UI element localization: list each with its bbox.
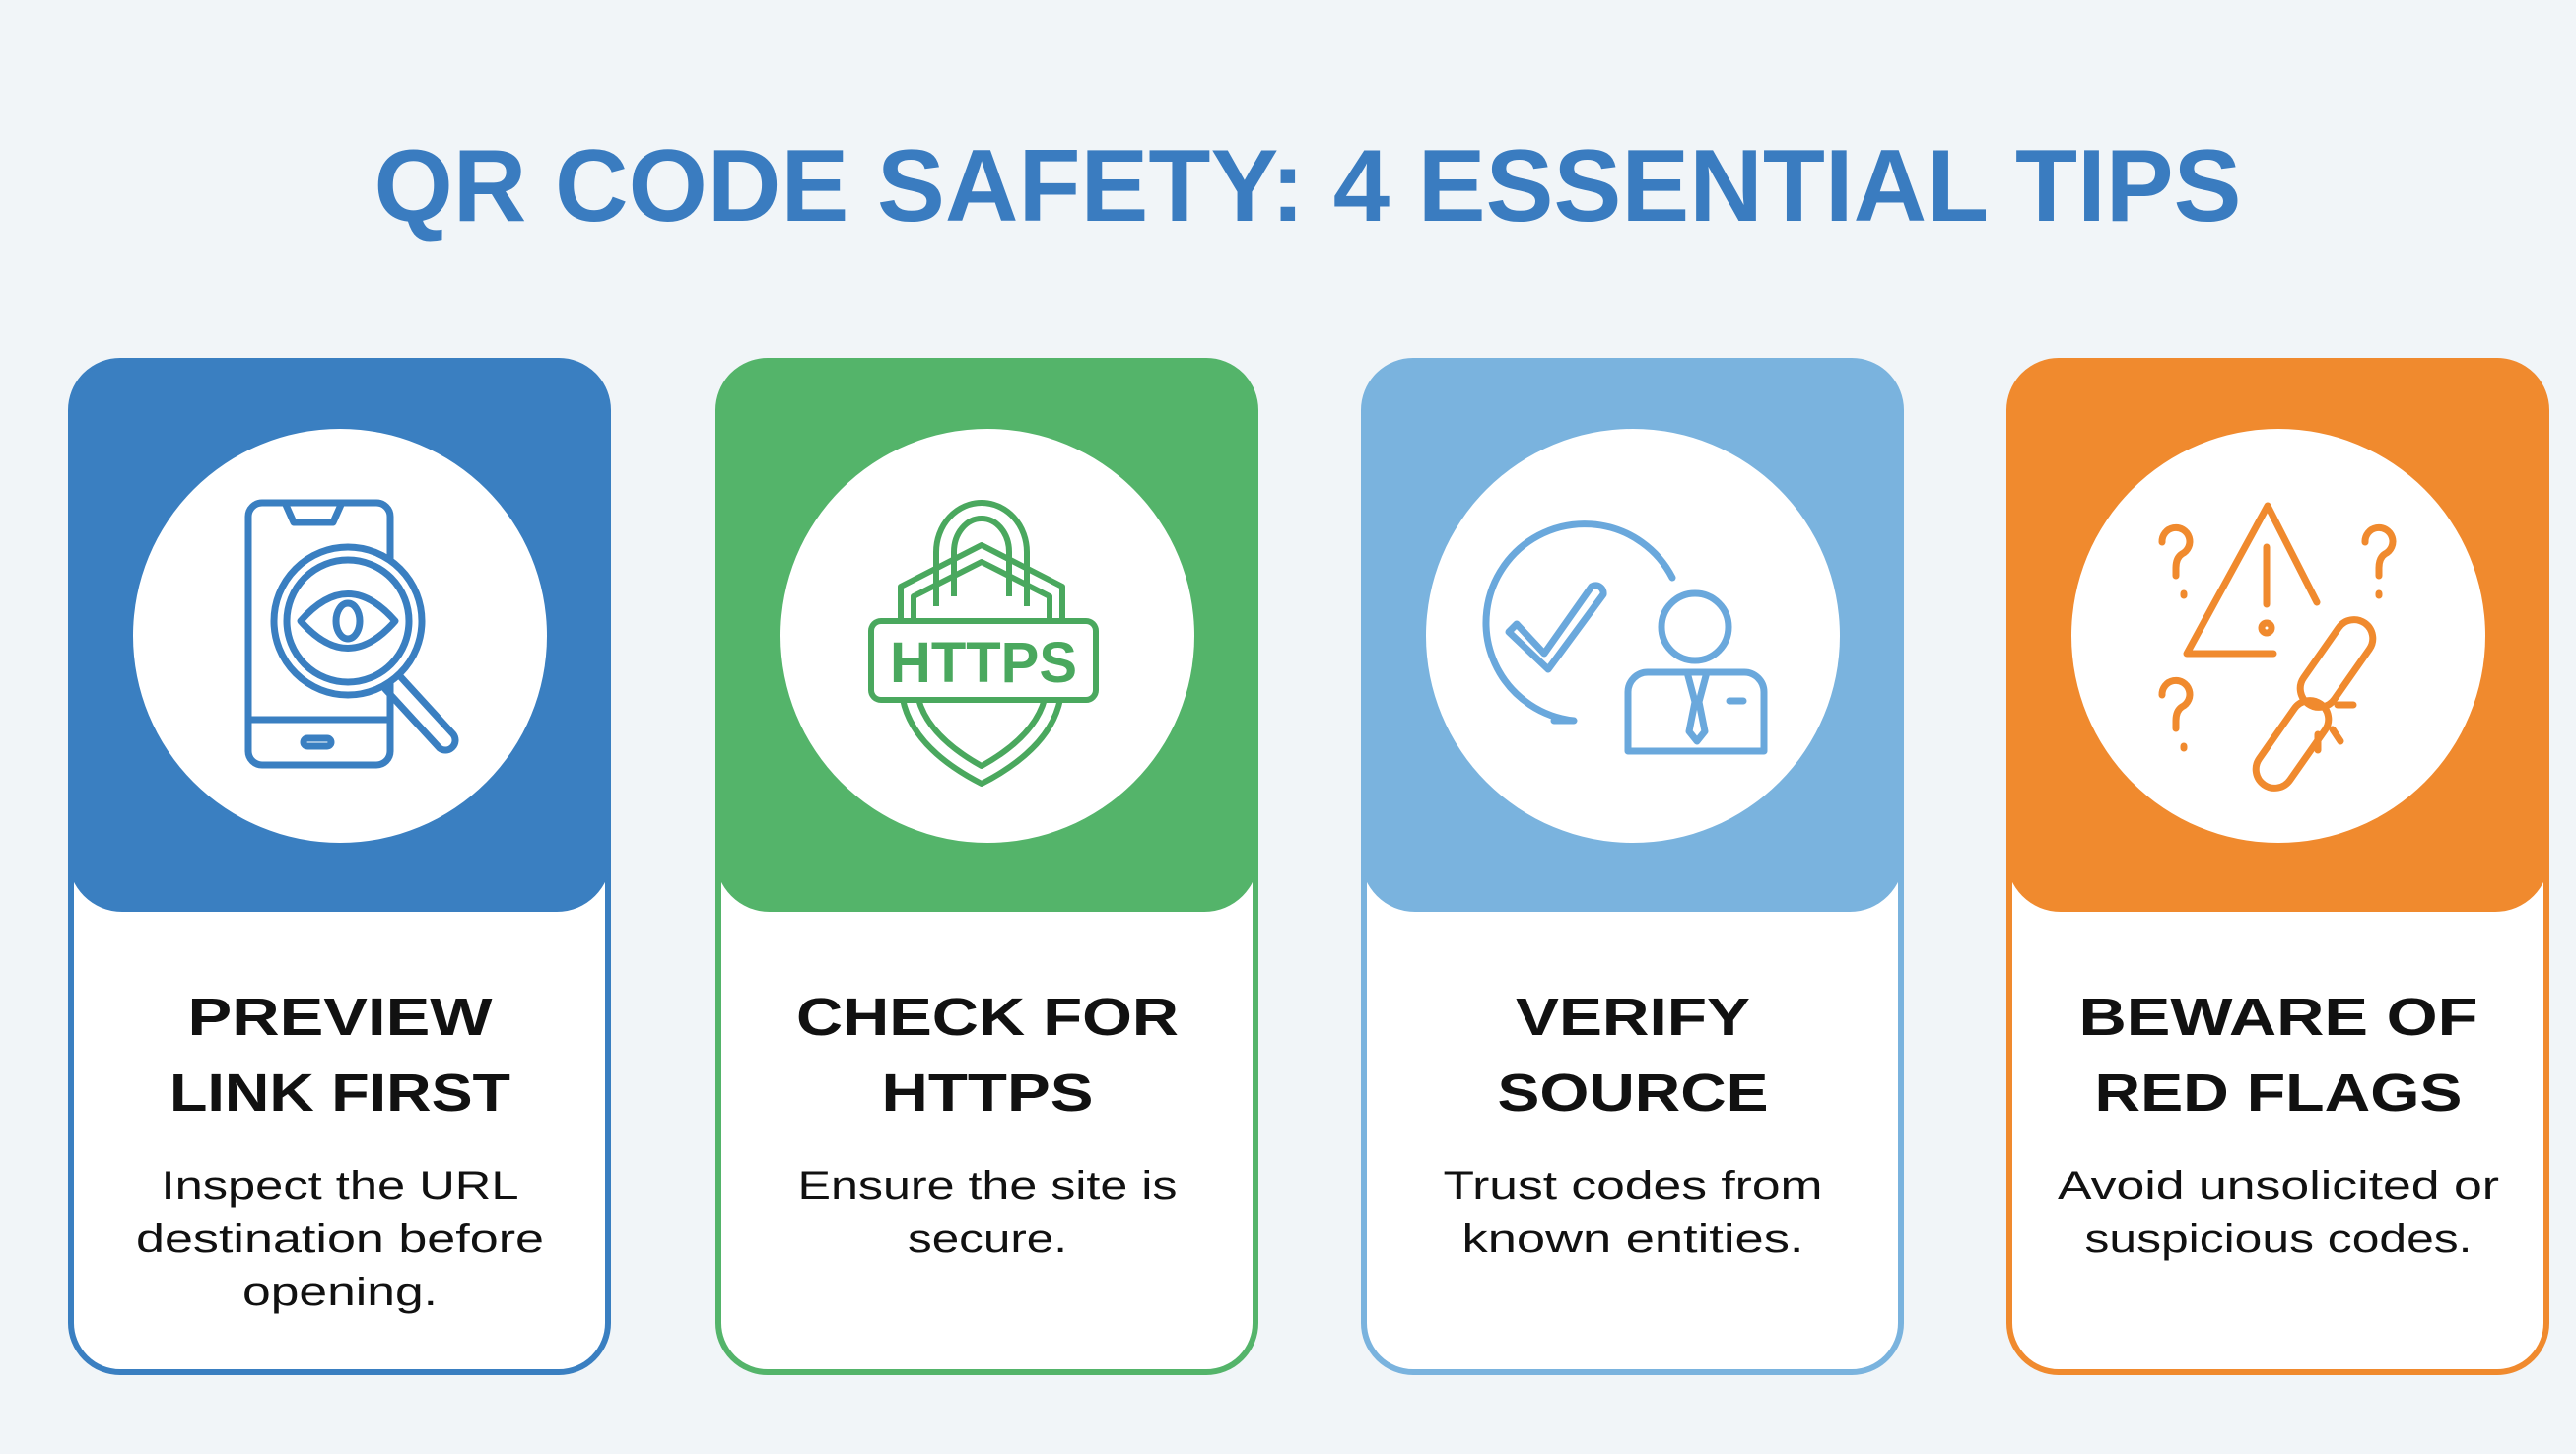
description: secure. <box>908 1217 1067 1261</box>
panel: check for https: HTTPS <box>881 1064 1094 1123</box>
description <box>798 1164 1177 1261</box>
heading: VERIFY <box>1516 988 1750 1047</box>
icon: https lock shield <box>871 503 1096 784</box>
panel: preview link first: LINK FIRST <box>169 1064 510 1123</box>
panel: beware of red flags: RED FLAGS <box>2095 1064 2462 1123</box>
icon: https lock shield: HTTPS <box>890 631 1077 695</box>
heading: CHECK FOR <box>796 988 1179 1047</box>
panel: beware of red flags <box>2006 360 2549 1372</box>
description <box>2058 1164 2499 1261</box>
description <box>1443 1164 1823 1261</box>
icon: check and person <box>1486 524 1764 751</box>
title: QR CODE SAFETY: 4 ESSENTIAL TIPS <box>374 129 2241 243</box>
description <box>136 1164 544 1314</box>
panel: preview link first <box>68 360 611 1372</box>
panel: check for https <box>715 360 1258 1372</box>
panel: verify source: SOURCE <box>1498 1064 1768 1123</box>
description: Ensure the site is <box>798 1164 1177 1208</box>
description: suspicious codes. <box>2085 1217 2472 1261</box>
heading: PREVIEW <box>187 988 493 1047</box>
description: opening. <box>242 1271 438 1314</box>
description: known entities. <box>1462 1217 1803 1261</box>
description: Inspect the URL <box>162 1164 518 1208</box>
icon: phone with magnifier <box>248 503 455 765</box>
heading: BEWARE OF <box>2079 988 2477 1047</box>
icon: warning, broken chain, question marks <box>2162 506 2393 796</box>
description: Avoid unsolicited or <box>2058 1164 2499 1208</box>
description: Trust codes from <box>1443 1164 1823 1208</box>
description: destination before <box>136 1217 544 1261</box>
panel: verify source <box>1361 360 1904 1372</box>
